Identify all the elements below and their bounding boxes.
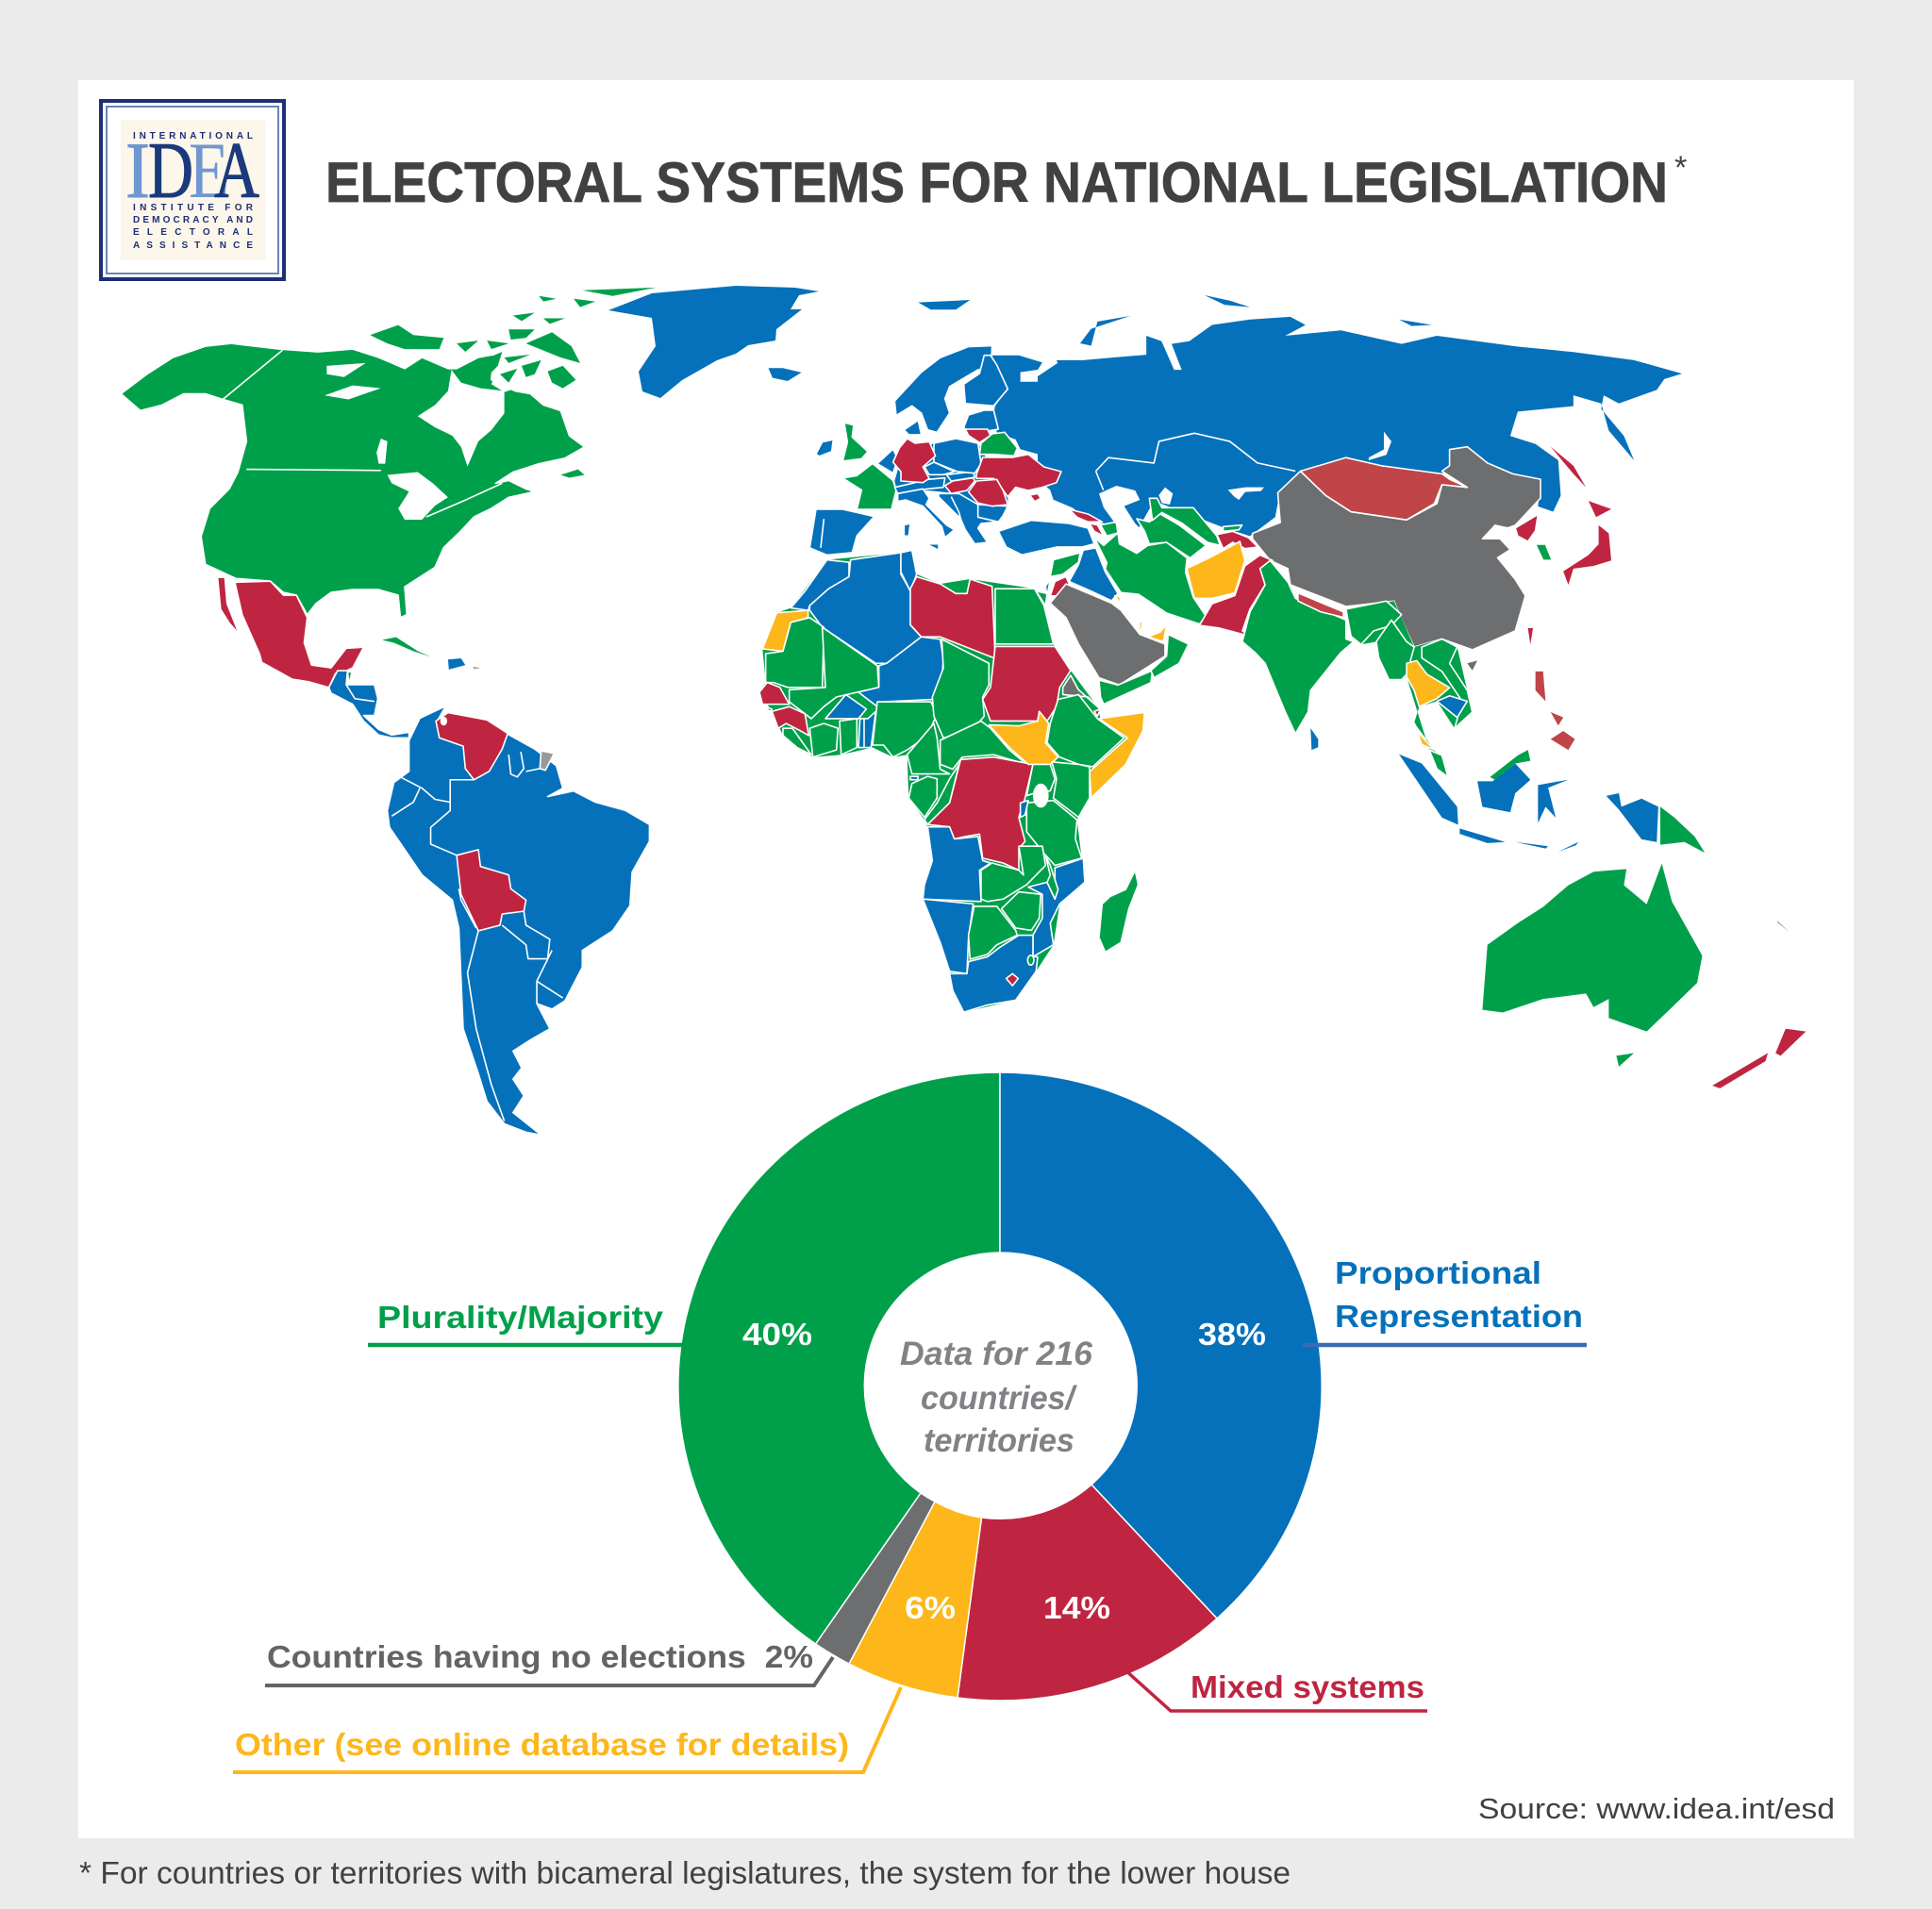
donut centre text: countries/ bbox=[921, 1380, 1077, 1417]
Hudson Strait bbox=[491, 379, 517, 392]
title asterisk: * bbox=[1674, 150, 1687, 186]
Poland and Baltics bbox=[934, 410, 998, 473]
United Kingdom bbox=[842, 423, 868, 461]
map: Americas bbox=[121, 288, 656, 1135]
India bbox=[1242, 560, 1354, 734]
slice: Proportional Representation 38% bbox=[1000, 1072, 1322, 1618]
map: Africa bbox=[759, 548, 1189, 1012]
Ireland bbox=[816, 440, 833, 456]
Bolivia bbox=[457, 850, 526, 931]
Australia bbox=[1482, 864, 1702, 1067]
slice: Other 6% bbox=[849, 1502, 981, 1698]
Madagascar bbox=[1099, 871, 1139, 952]
Central Africa bbox=[908, 639, 1033, 871]
logo: International IDEA: DEMOCRACY AND bbox=[133, 215, 253, 225]
Ukraine bbox=[976, 455, 1061, 502]
Taiwan bbox=[1528, 628, 1533, 644]
Hudson Bay bbox=[418, 370, 505, 467]
logo: International IDEA: A bbox=[214, 126, 259, 215]
Sri Lanka bbox=[1310, 728, 1318, 750]
Germany bbox=[893, 439, 936, 483]
Afghanistan bbox=[1187, 541, 1245, 598]
label: Plurality/Majority: Plurality/Majority bbox=[377, 1300, 664, 1335]
title: ELECTORAL SYSTEMS FOR NATIONAL LEGISLATION bbox=[325, 151, 1668, 214]
label: Mixed systems bbox=[1124, 1669, 1427, 1711]
label: Other: Other (see online database for details) bbox=[235, 1727, 849, 1762]
Turkey bbox=[998, 521, 1094, 555]
donut centre text: territories bbox=[924, 1422, 1074, 1459]
Mexico bbox=[218, 577, 363, 688]
label: Proportional Representation: Proportional bbox=[1335, 1255, 1541, 1290]
Scandinavia bbox=[894, 346, 1008, 435]
Belarus bbox=[979, 432, 1017, 456]
Iberia bbox=[809, 509, 874, 555]
source: Source: www.idea.int/esd bbox=[1478, 1792, 1835, 1825]
label: Countries having no elections: Countries having no elections 2% bbox=[267, 1639, 813, 1674]
New Caledonia bbox=[1777, 921, 1789, 931]
world map bbox=[121, 286, 1806, 1135]
Central Europe base bbox=[894, 443, 1008, 506]
label: Other bbox=[233, 1687, 901, 1772]
Indonesia bbox=[1399, 750, 1658, 852]
logo: International IDEA: INTERNATIONAL bbox=[133, 131, 253, 141]
Central Europe, Italy and Balkans bbox=[894, 462, 1008, 550]
Romania bbox=[969, 479, 1008, 506]
Africa base bbox=[759, 553, 1144, 1012]
East Africa bbox=[1021, 694, 1144, 866]
Caucasus bbox=[1069, 509, 1118, 536]
Middle East bbox=[1045, 548, 1189, 705]
map: East and South Asia bbox=[1187, 447, 1806, 1088]
logo: International IDEA: ASSISTANCE bbox=[133, 241, 253, 251]
donut centre text: Data for 216 bbox=[900, 1336, 1093, 1372]
Benelux bbox=[877, 449, 898, 473]
North America: Canada and USA bbox=[121, 343, 585, 618]
Hungary bbox=[945, 478, 974, 493]
Nepal bbox=[1298, 593, 1343, 617]
logo: International IDEA: ELECTORAL bbox=[133, 227, 253, 238]
donut chart bbox=[678, 1072, 1322, 1701]
France bbox=[842, 464, 896, 509]
logo: International IDEA: E bbox=[189, 126, 229, 215]
map: Iran and Central Asia bbox=[1094, 486, 1291, 624]
Japan bbox=[1551, 447, 1611, 585]
value 14%: 14% bbox=[1043, 1590, 1110, 1625]
logo: International IDEA bbox=[101, 101, 284, 279]
label: Countries having no elections bbox=[265, 1639, 833, 1685]
Pakistan bbox=[1199, 555, 1273, 637]
Sudan bbox=[983, 646, 1071, 721]
South East Asia mainland bbox=[1346, 601, 1473, 777]
Southern Africa bbox=[923, 827, 1085, 1012]
Iceland bbox=[767, 367, 804, 382]
Lithuania bbox=[965, 429, 991, 442]
slice: no elections 2% bbox=[816, 1493, 935, 1664]
Venezuela bbox=[436, 713, 508, 780]
French Guiana bbox=[540, 751, 554, 771]
New Zealand bbox=[1712, 1029, 1806, 1088]
South Sudan bbox=[989, 711, 1058, 764]
Philippines bbox=[1536, 672, 1574, 750]
Canadian Arctic islands bbox=[370, 288, 656, 477]
Greenland bbox=[608, 286, 819, 398]
logo: International IDEA: D bbox=[148, 126, 193, 215]
Papua New Guinea bbox=[1660, 806, 1705, 853]
Korea bbox=[1515, 514, 1552, 560]
Hainan bbox=[1467, 660, 1477, 671]
North Africa bbox=[762, 550, 1054, 663]
Mongolia bbox=[1301, 457, 1467, 520]
footnote: * For countries or territories with bicameral legislatures, the system for the lower house bbox=[79, 1855, 1291, 1890]
South America borders bbox=[391, 752, 563, 1121]
Central America bbox=[329, 671, 409, 738]
label: Mixed systems: Mixed systems bbox=[1191, 1669, 1424, 1704]
donut centre text bbox=[900, 1336, 1093, 1459]
logo: International IDEA: INSTITUTE FOR bbox=[133, 203, 254, 213]
label: Proportional Representation bbox=[1303, 1255, 1587, 1345]
slice: Mixed systems 14% bbox=[958, 1485, 1217, 1701]
West Africa bbox=[759, 618, 943, 757]
South America bbox=[388, 706, 649, 1135]
Eritrea bbox=[1063, 675, 1097, 706]
value 40%: 40% bbox=[742, 1317, 812, 1352]
Caribbean islands bbox=[382, 638, 480, 670]
China bbox=[1253, 447, 1541, 650]
map: Russia and Central Asia base bbox=[918, 295, 1682, 536]
map: Europe bbox=[767, 346, 1118, 555]
logo: International IDEA: I bbox=[125, 126, 150, 215]
value 38%: 38% bbox=[1198, 1317, 1266, 1352]
value 6%: 6% bbox=[905, 1590, 956, 1625]
slice: Plurality/Majority 40% bbox=[678, 1072, 1000, 1644]
label: Proportional Representation: Representation bbox=[1335, 1299, 1583, 1334]
